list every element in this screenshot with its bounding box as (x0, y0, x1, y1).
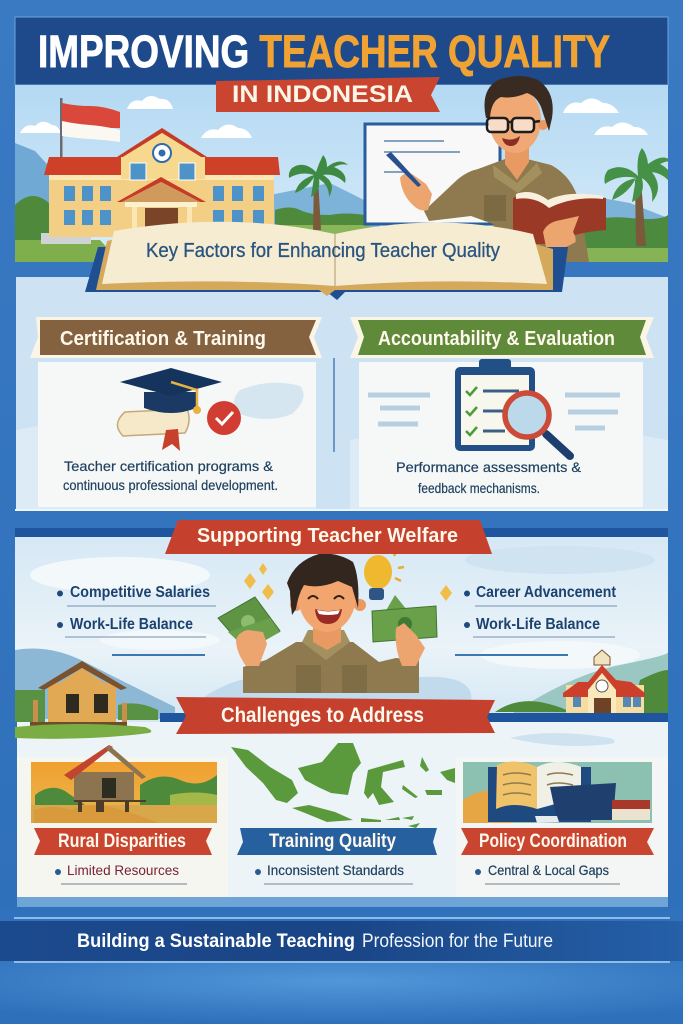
bullet: limited resources: Limited Resources (67, 862, 179, 878)
shirt (424, 159, 589, 262)
subtitle ribbon (216, 77, 440, 112)
card: accountability (359, 359, 643, 507)
text: certification: continuous professional development. (63, 477, 278, 493)
icon: sparkles (244, 563, 452, 601)
text: certification (63, 458, 278, 493)
bullet list right: Career Advancement (476, 584, 617, 601)
footer text (77, 931, 553, 952)
ribbon: policy coordination: Policy Coordination (479, 831, 627, 852)
ribbon: challenges to address: Challenges to Address (221, 704, 424, 727)
school building (44, 128, 280, 237)
footer text: Profession for the Future (362, 931, 553, 952)
panel: challenges (15, 661, 668, 907)
neck (505, 148, 529, 180)
text: certification: Teacher certification programs & (64, 458, 274, 474)
flag pole and flag (41, 98, 120, 244)
ribbon: supporting teacher welfare: Supporting Teacher Welfare (197, 525, 458, 547)
clouds (20, 96, 648, 138)
hero scene (15, 76, 672, 262)
icon: clipboard and magnifier (455, 359, 570, 456)
bullet: central and local gaps (475, 862, 620, 884)
bullet list right: Work-Life Balance (476, 616, 600, 633)
icon: graduation cap and diploma (117, 368, 241, 451)
body (243, 642, 419, 693)
ribbon: training quality: Training Quality (269, 831, 396, 852)
bullet list left (57, 584, 216, 655)
ribbon: training quality (237, 828, 437, 855)
ribbon: accountability: Accountability & Evaluation (378, 328, 615, 350)
face (489, 87, 541, 153)
welfare background clouds (30, 546, 655, 669)
bullet: inconsistent standards (255, 862, 413, 884)
bullet list left: Work-Life Balance (70, 616, 193, 633)
bottom glow (0, 963, 683, 1024)
bullet list right (455, 584, 617, 655)
icon: wooden house (15, 661, 151, 739)
icon: light bulb (364, 550, 404, 600)
icon: small school (563, 650, 645, 713)
ribbon: supporting teacher welfare (165, 520, 492, 554)
palm tree middle (289, 155, 348, 230)
title: IMPROVING TEACHER QUALITY (38, 26, 610, 77)
eyes (308, 596, 344, 599)
bullet: inconsistent standards: Inconsistent Standards (267, 862, 404, 878)
panel: key factors (15, 222, 668, 510)
ribbon: certification: Certification & Training (60, 328, 266, 350)
open book (513, 195, 606, 244)
mountains (15, 143, 49, 205)
ribbon: rural disparities: Rural Disparities (58, 831, 186, 852)
footer banner (0, 918, 683, 962)
holding hand (543, 216, 579, 247)
subtitle ribbon: IN INDONESIA (232, 81, 413, 108)
card: policy coordination (456, 757, 668, 897)
card: certification (38, 362, 316, 507)
text: accountability (396, 459, 582, 496)
ribbon: accountability (350, 317, 654, 358)
bullet: central and local gaps: Central & Local Gaps (488, 862, 609, 878)
greenery (15, 196, 49, 240)
bullet list left: Competitive Salaries (70, 584, 210, 601)
card: rural disparities (17, 745, 228, 897)
hair (287, 554, 358, 615)
text: accountability: feedback mechanisms. (418, 480, 540, 496)
title banner (15, 17, 668, 85)
ribbon: certification (30, 317, 322, 358)
book heading: Key Factors for Enhancing Teacher Quality (146, 240, 500, 262)
bullet: limited resources (55, 862, 187, 884)
mouth (502, 136, 520, 146)
glasses (487, 118, 508, 132)
right money (372, 595, 437, 642)
pointing hand (400, 174, 432, 210)
policy image (463, 761, 652, 823)
smile (315, 609, 342, 624)
ribbon: policy coordination (461, 828, 654, 855)
hands (236, 630, 267, 666)
hair (484, 76, 553, 131)
welfare background hills (15, 648, 668, 722)
whiteboard (365, 124, 500, 224)
happy teacher with money (218, 554, 437, 693)
left money (218, 597, 280, 650)
teacher with book (386, 76, 606, 262)
card: training quality text (237, 828, 437, 884)
rural image (31, 745, 217, 823)
ears (290, 599, 302, 611)
ribbon: rural disparities (34, 828, 212, 855)
map of Indonesia (231, 743, 455, 828)
head (298, 558, 356, 632)
ribbon: challenges to address (176, 697, 495, 734)
footer text: Building a Sustainable Teaching (77, 931, 355, 952)
panel: teacher welfare (15, 528, 668, 722)
key factors open book (85, 222, 568, 300)
text: accountability: Performance assessments & (396, 459, 582, 475)
palm tree right (604, 148, 672, 246)
